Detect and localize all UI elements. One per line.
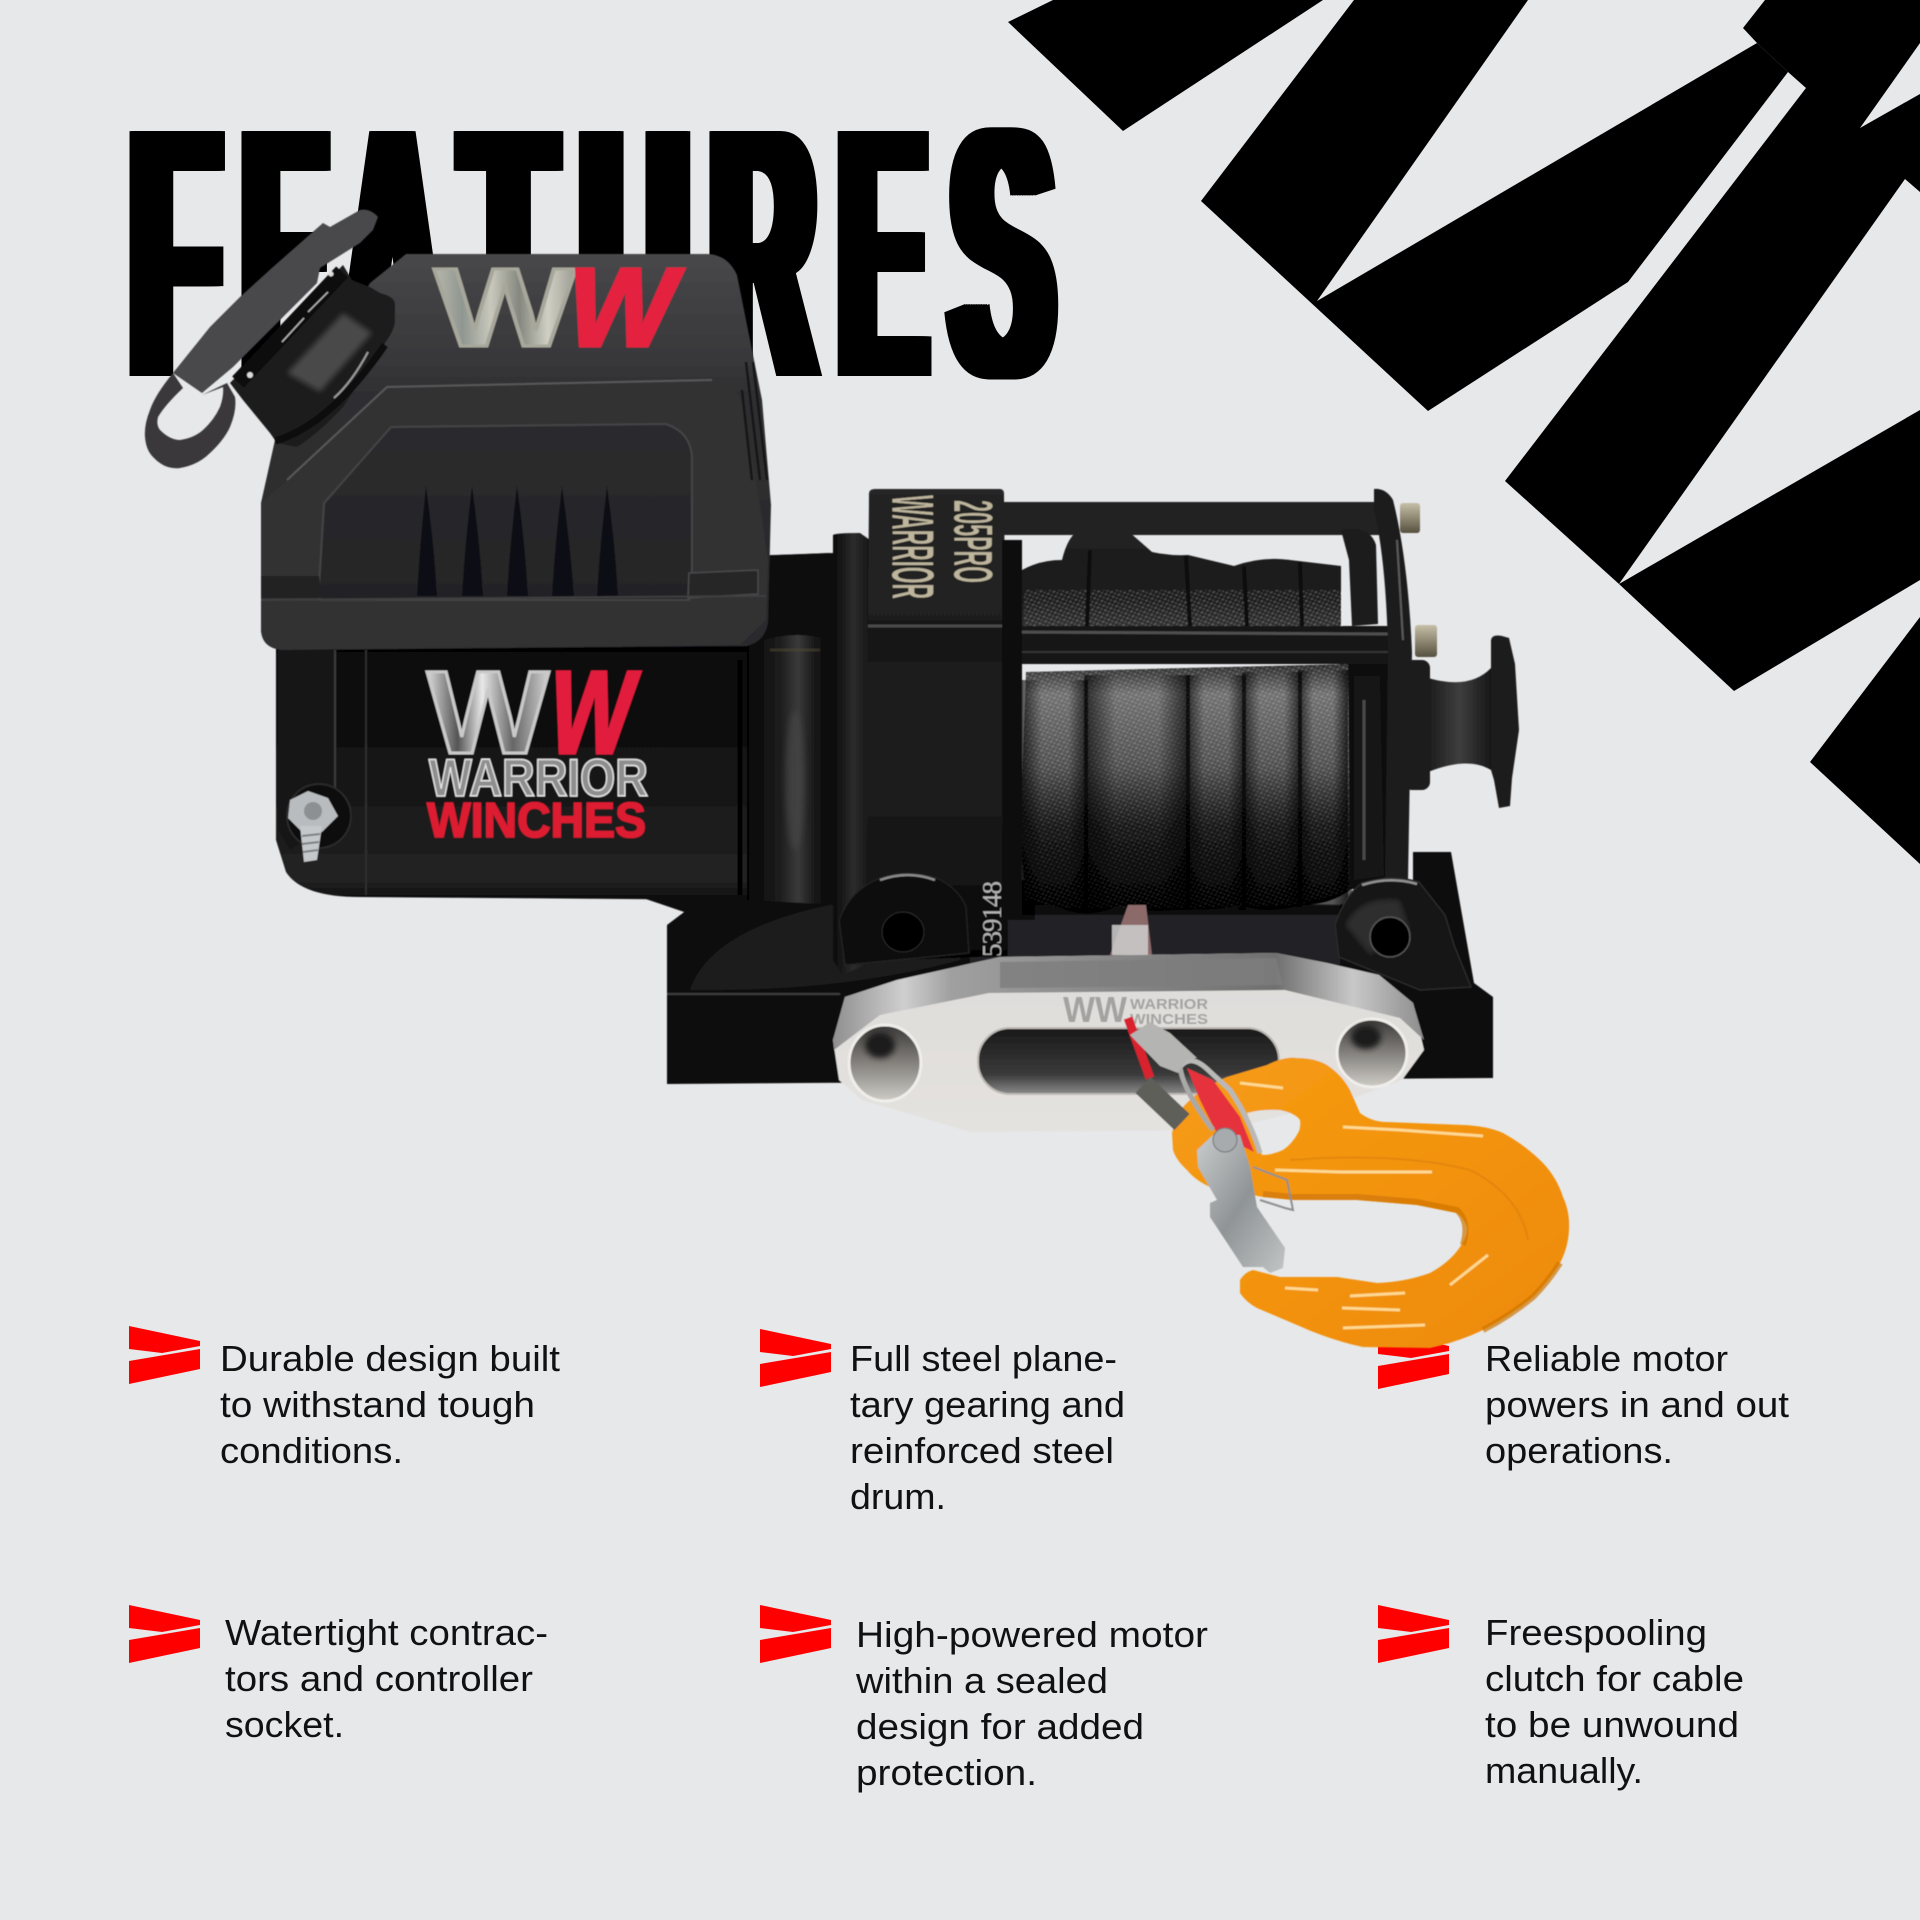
front raised panel (319, 424, 692, 600)
feature text: Watertight contrac- (225, 1612, 548, 1653)
feature text: conditions. (220, 1430, 403, 1471)
feature text: manually. (1485, 1750, 1643, 1791)
icon: red chevron (760, 1605, 831, 1663)
feature text: Full steel plane- (850, 1338, 1117, 1379)
control box housing (261, 254, 771, 650)
fairlead (833, 953, 1424, 1132)
feature text: reinforced steel (850, 1430, 1114, 1471)
feature text (225, 1612, 548, 1745)
frame bars and end plate (1004, 489, 1437, 886)
feature text: to withstand tough (220, 1384, 535, 1425)
mounting lugs (839, 873, 1471, 990)
gear tower with emblem: 205PRO (942, 500, 1005, 583)
motor badge: W (427, 647, 550, 779)
feature text: High-powered motor (856, 1614, 1208, 1655)
hook (1172, 1058, 1569, 1348)
gear tower with emblem (866, 489, 1022, 960)
feature text: to be unwound (1485, 1704, 1739, 1745)
feature text (1485, 1338, 1789, 1471)
feature text: tary gearing and (850, 1384, 1125, 1425)
motor badge: W (540, 648, 645, 779)
feature text: Durable design built (220, 1338, 560, 1379)
rope lower wraps (1020, 664, 1390, 915)
feature text: protection. (856, 1752, 1037, 1793)
title (120, 55, 1058, 452)
fairlead engraved logo: WARRIOR (1130, 996, 1208, 1013)
feature text (850, 1338, 1125, 1517)
feature text (855, 1614, 1208, 1793)
base plate (667, 852, 1493, 1084)
title: F (120, 55, 206, 452)
icon: red chevron (129, 1605, 200, 1663)
title: U (570, 55, 675, 452)
feature text: socket. (225, 1704, 344, 1745)
top badge: W (555, 244, 690, 370)
icon: red chevron (1378, 1605, 1449, 1663)
feature: freespooling clutch (1378, 1605, 1744, 1791)
serial number: 539148 (977, 881, 1007, 957)
icon: red chevron (129, 1326, 200, 1384)
title: T (452, 55, 541, 452)
feature text: operations. (1485, 1430, 1673, 1471)
rope upper wraps (1022, 521, 1344, 630)
feature text: tors and controller (225, 1658, 533, 1699)
feature text: clutch for cable (1485, 1658, 1744, 1699)
motor neck and ring (747, 533, 878, 975)
motor badge (427, 647, 648, 848)
tower emblem plate (879, 495, 1005, 599)
motor (276, 646, 760, 918)
feature: durable design (129, 1326, 560, 1471)
corner tabs (261, 576, 322, 598)
rear bolt on motor (287, 784, 351, 862)
side vents (742, 362, 767, 480)
title: S (940, 55, 1039, 452)
hub on drum end (1404, 636, 1519, 808)
icon: red chevron (760, 1329, 831, 1387)
socket body (230, 265, 395, 447)
feature text: within a sealed (855, 1660, 1108, 1701)
thimble and red rope (1128, 1018, 1260, 1153)
title: R (700, 55, 802, 452)
thin rope from drum (1110, 905, 1152, 955)
feature text: Freespooling (1485, 1612, 1707, 1653)
feature: high-powered motor (760, 1605, 1208, 1793)
vent slots (417, 486, 618, 596)
feature: reliable motor (1378, 1331, 1789, 1471)
gear tower with emblem: WARRIOR (879, 495, 946, 599)
hook shading (1263, 1194, 1560, 1330)
feature text: Reliable motor (1485, 1338, 1728, 1379)
title: A (331, 55, 431, 452)
rubber cap (173, 210, 378, 393)
fairlead engraved logo (1063, 989, 1208, 1030)
icon: red chevron (1378, 1331, 1449, 1389)
motor badge: WARRIOR (429, 749, 648, 808)
title: E (829, 55, 916, 452)
top badge (434, 244, 690, 370)
fairlead engraved logo: WW (1063, 989, 1127, 1030)
fairlead engraved logo: WINCHES (1130, 1011, 1208, 1028)
feature text: design for added (856, 1706, 1144, 1747)
hook latch and spring (1197, 1128, 1293, 1273)
feature text: drum. (850, 1476, 946, 1517)
feature: watertight contactors (129, 1605, 548, 1745)
cap strap loop (145, 373, 235, 468)
feature: planetary gearing (760, 1329, 1125, 1517)
socket collar (238, 272, 342, 382)
feature text (220, 1338, 560, 1471)
feature text: powers in and out (1485, 1384, 1789, 1425)
motor badge: WINCHES (427, 794, 646, 848)
socket with cap (145, 210, 395, 468)
top badge: W (434, 245, 576, 370)
hook highlights (1240, 1083, 1488, 1328)
bolts on end plate (1400, 503, 1420, 533)
feature text (1485, 1612, 1744, 1791)
title: E (232, 55, 317, 452)
